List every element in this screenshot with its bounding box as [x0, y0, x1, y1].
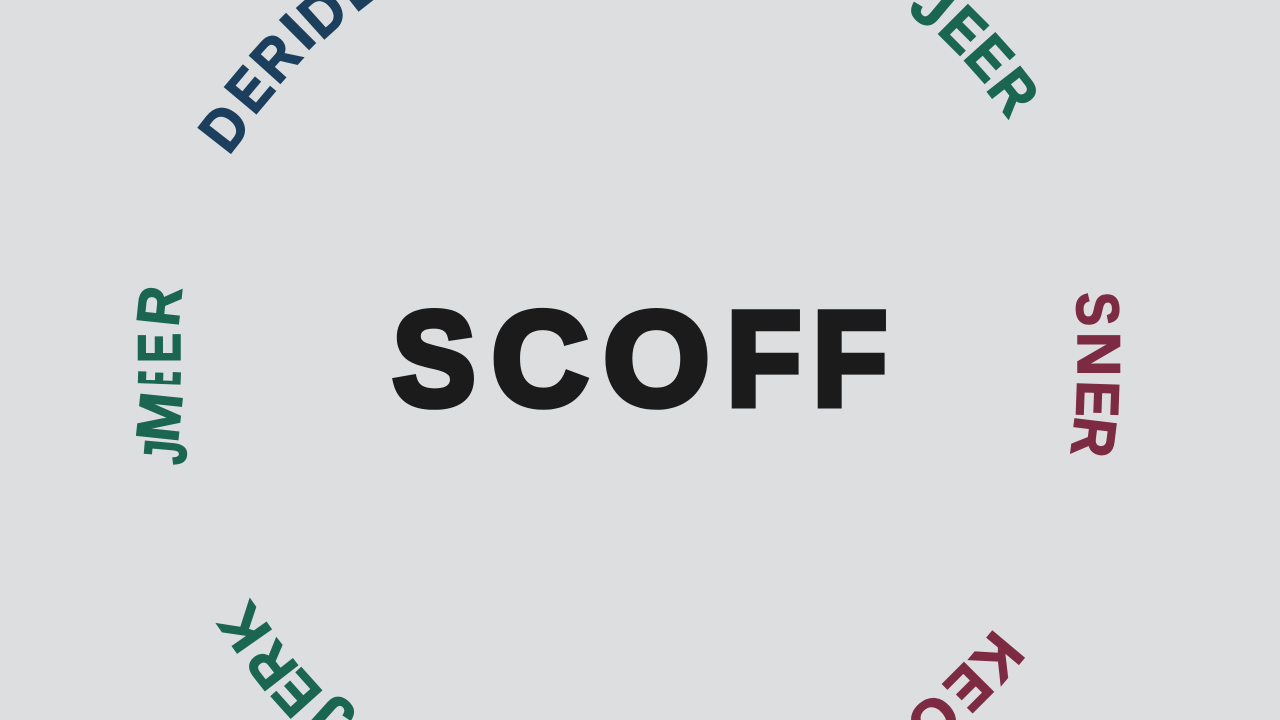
ring word: SNER — [1057, 291, 1132, 460]
ring word: SNER: E — [1063, 380, 1131, 418]
ring word: JERK — [206, 591, 367, 720]
ring word: KEO — [894, 620, 1036, 720]
ring word: JMEER: R — [125, 283, 196, 329]
central word: SCOFF: F — [813, 285, 887, 434]
ring word: SNER: S — [1063, 291, 1132, 327]
central word: SCOFF: S — [392, 285, 476, 434]
ring word: DERIDE: I — [268, 2, 327, 61]
ring word: JERK: R — [234, 629, 311, 701]
ring word: JEER: R — [974, 56, 1051, 128]
ring word: JEER — [898, 0, 1051, 128]
central word: SCOFF: O — [603, 283, 710, 434]
ring word: JERK: K — [206, 591, 284, 663]
central word: SCOFF: F — [727, 285, 801, 434]
ring word: JMEER: E — [127, 333, 194, 363]
ring word: JMEER: J — [132, 437, 201, 467]
ring word: KEO: K — [958, 620, 1036, 694]
ring word: JMEER: M — [123, 389, 196, 445]
central word: SCOFF — [392, 283, 887, 434]
ring word: SNER: N — [1065, 332, 1132, 376]
ring word: JEER: E — [952, 22, 1026, 94]
ring word: JMEER: E — [125, 370, 194, 386]
ring word: DERIDE: R — [238, 21, 314, 95]
ring word: SNER: R — [1057, 414, 1129, 460]
ring word: DERIDE — [187, 0, 395, 164]
ring word: DERIDE: D — [187, 92, 264, 164]
ring word: DERIDE: E — [213, 55, 286, 125]
central word: SCOFF: C — [492, 285, 588, 434]
ring word: JMEER — [123, 283, 201, 467]
